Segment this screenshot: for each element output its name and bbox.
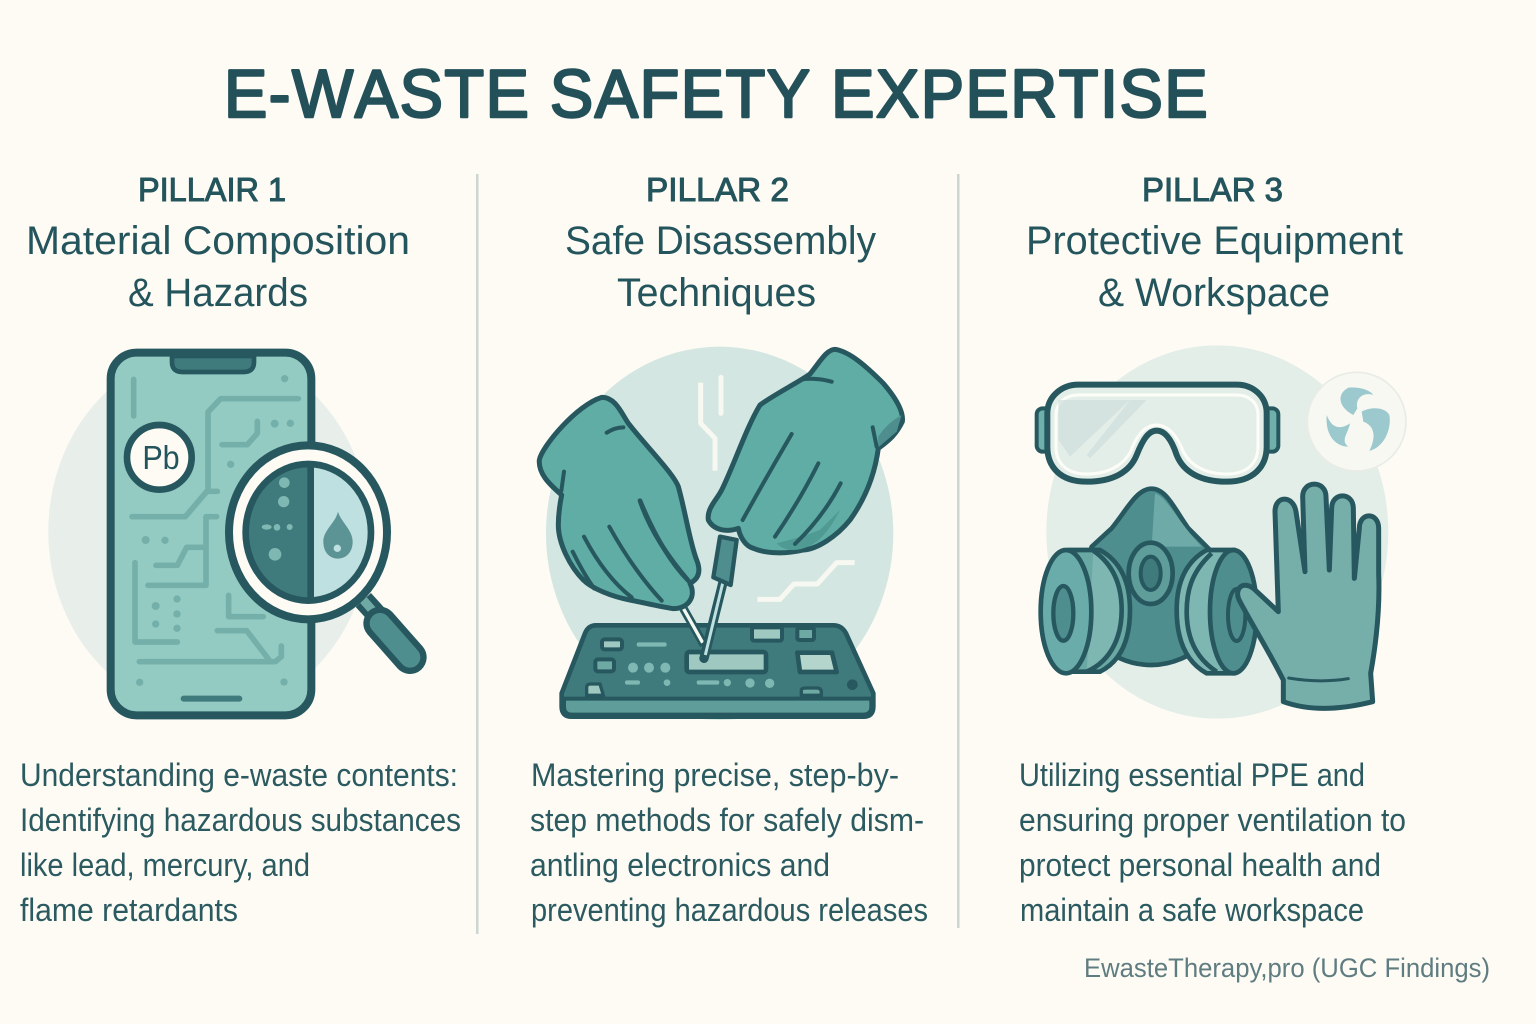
right cartridge: [1177, 550, 1257, 673]
icon: gloved hands disassembling circuit board: [539, 347, 903, 720]
icon: safety goggles: [1037, 385, 1278, 482]
pillar 2 description: [530, 757, 928, 928]
pillar 2 description: Mastering precise, step-by-: [531, 757, 899, 793]
tweezers and screwdriver: [683, 537, 737, 658]
icon: ventilation fan: [1307, 372, 1406, 471]
circuit board: [562, 625, 873, 717]
pillar 2 heading: [565, 171, 876, 315]
pillar 2 heading: Techniques: [617, 271, 816, 315]
pillar 1 description: Identifying hazardous substances: [20, 802, 461, 838]
left glove: [539, 397, 699, 609]
pillar 1 description: [20, 757, 461, 928]
pillar 1 heading: [26, 171, 410, 315]
panel: pillar 2: [530, 171, 928, 928]
pillar 2 description: step methods for safely dism-: [530, 802, 924, 838]
pillar 2 description: preventing hazardous releases: [531, 892, 928, 928]
pillar 2 heading: Safe Disassembly: [565, 219, 876, 263]
pillar 3 description: [1019, 757, 1406, 928]
left cartridge: [1041, 550, 1130, 673]
icon: protective equipment: [1037, 345, 1406, 719]
title: E-WASTE SAFETY EXPERTISE: [224, 57, 1208, 132]
pillar 1 heading: Material Composition: [26, 219, 410, 263]
icon: Pb element badge: Pb: [142, 440, 180, 477]
icon: protective glove: [1238, 484, 1379, 708]
icon: respirator mask: [1041, 489, 1257, 673]
pillar 3 heading: & Workspace: [1098, 271, 1330, 315]
pillar 3 heading: Protective Equipment: [1026, 219, 1403, 263]
pillar 2 description: antling electronics and: [530, 847, 830, 883]
panel: pillar 3: [1019, 171, 1406, 928]
pillar 3 description: protect personal health and: [1019, 847, 1381, 883]
footer attribution: EwasteTherapy,pro (UGC Findings): [1084, 953, 1490, 983]
pillar 1 description: like lead, mercury, and: [20, 847, 310, 883]
pillar 1 heading: & Hazards: [128, 271, 308, 315]
pillar 1 description: flame retardants: [20, 892, 238, 928]
pillar 1 heading: PILLAIR 1: [138, 171, 286, 208]
pillar 2 heading: PILLAR 2: [646, 171, 789, 208]
icon: Pb element badge: [127, 425, 192, 490]
pillar 3 description: Utilizing essential PPE and: [1019, 757, 1365, 793]
pillar 3 heading: [1026, 171, 1403, 315]
pillar 1 description: Understanding e-waste contents:: [20, 757, 458, 793]
pillar 3 heading: PILLAR 3: [1142, 171, 1283, 208]
icon: magnifying glass: [229, 445, 410, 657]
panel: pillar 1: [20, 171, 461, 928]
pillar 3 description: maintain a safe workspace: [1020, 892, 1364, 928]
pillar 3 description: ensuring proper ventilation to: [1019, 802, 1406, 838]
icon: phone with magnifying glass: [48, 350, 410, 715]
right glove: [708, 349, 903, 553]
